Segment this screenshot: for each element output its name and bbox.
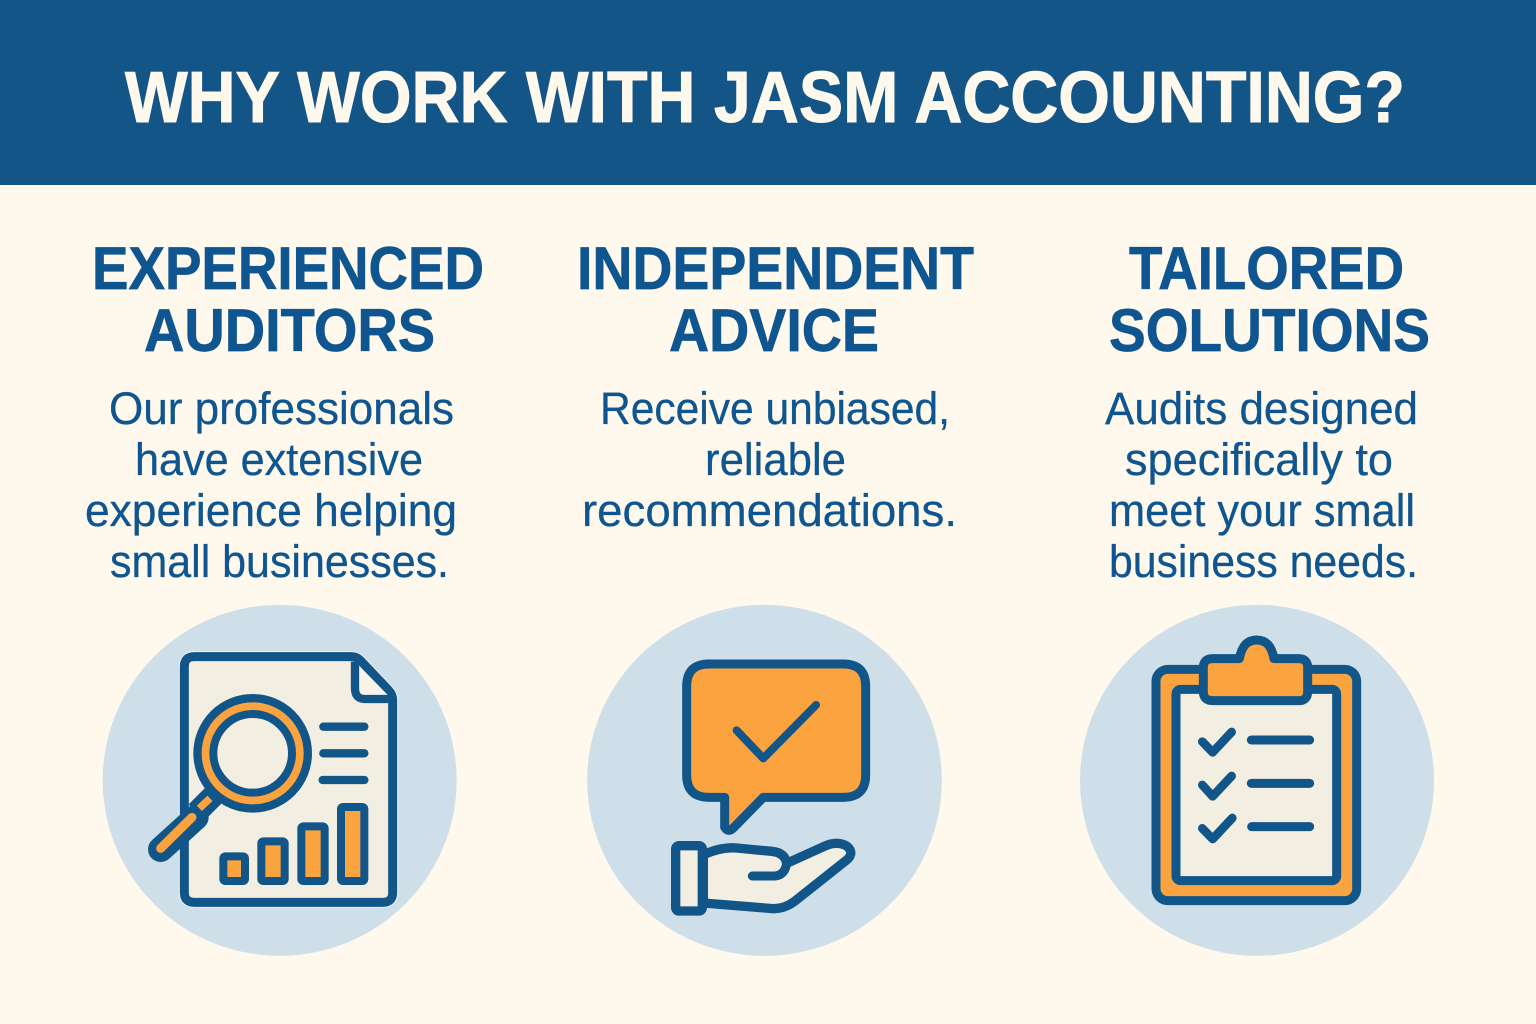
icon: speech bubble with check above open hand: [587, 605, 942, 956]
text block: independent advice description: Receive unbiased,: [600, 383, 950, 434]
text block: experienced auditors description: have extensive: [135, 434, 423, 485]
heading: independent advice: [577, 235, 974, 364]
heading: experienced auditors: AUDITORS: [144, 297, 435, 364]
title: WHY WORK WITH JASM ACCOUNTING?: [125, 58, 1405, 138]
heading: independent advice: INDEPENDENT: [577, 235, 974, 302]
heading: independent advice: ADVICE: [669, 297, 879, 364]
text block: tailored solutions description: Audits designed: [1105, 383, 1418, 434]
text block: independent advice description: [582, 383, 957, 536]
heading: tailored solutions: TAILORED: [1129, 235, 1404, 302]
text block: independent advice description: reliable: [705, 434, 846, 485]
panel: tailored solutions: [1080, 235, 1434, 956]
header banner: [0, 0, 1536, 185]
text block: experienced auditors description: experience helping: [85, 485, 457, 536]
text block: tailored solutions description: business needs.: [1109, 536, 1418, 587]
text block: independent advice description: recommendations.: [582, 485, 957, 536]
heading: tailored solutions: SOLUTIONS: [1109, 297, 1430, 364]
icon: document with magnifier and bar chart: [103, 605, 457, 956]
text block: tailored solutions description: meet your small: [1109, 485, 1415, 536]
heading: experienced auditors: EXPERIENCED: [92, 235, 484, 302]
text block: tailored solutions description: [1105, 383, 1418, 587]
text block: experienced auditors description: Our professionals: [109, 383, 454, 434]
text block: experienced auditors description: small businesses.: [110, 536, 449, 587]
heading: experienced auditors: [92, 235, 484, 364]
text block: experienced auditors description: [85, 383, 457, 587]
text block: tailored solutions description: specifically to: [1125, 434, 1393, 485]
heading: tailored solutions: [1109, 235, 1430, 364]
icon: clipboard checklist: [1080, 605, 1434, 956]
panel: experienced auditors: [85, 235, 484, 956]
panel: independent advice: [577, 235, 974, 956]
